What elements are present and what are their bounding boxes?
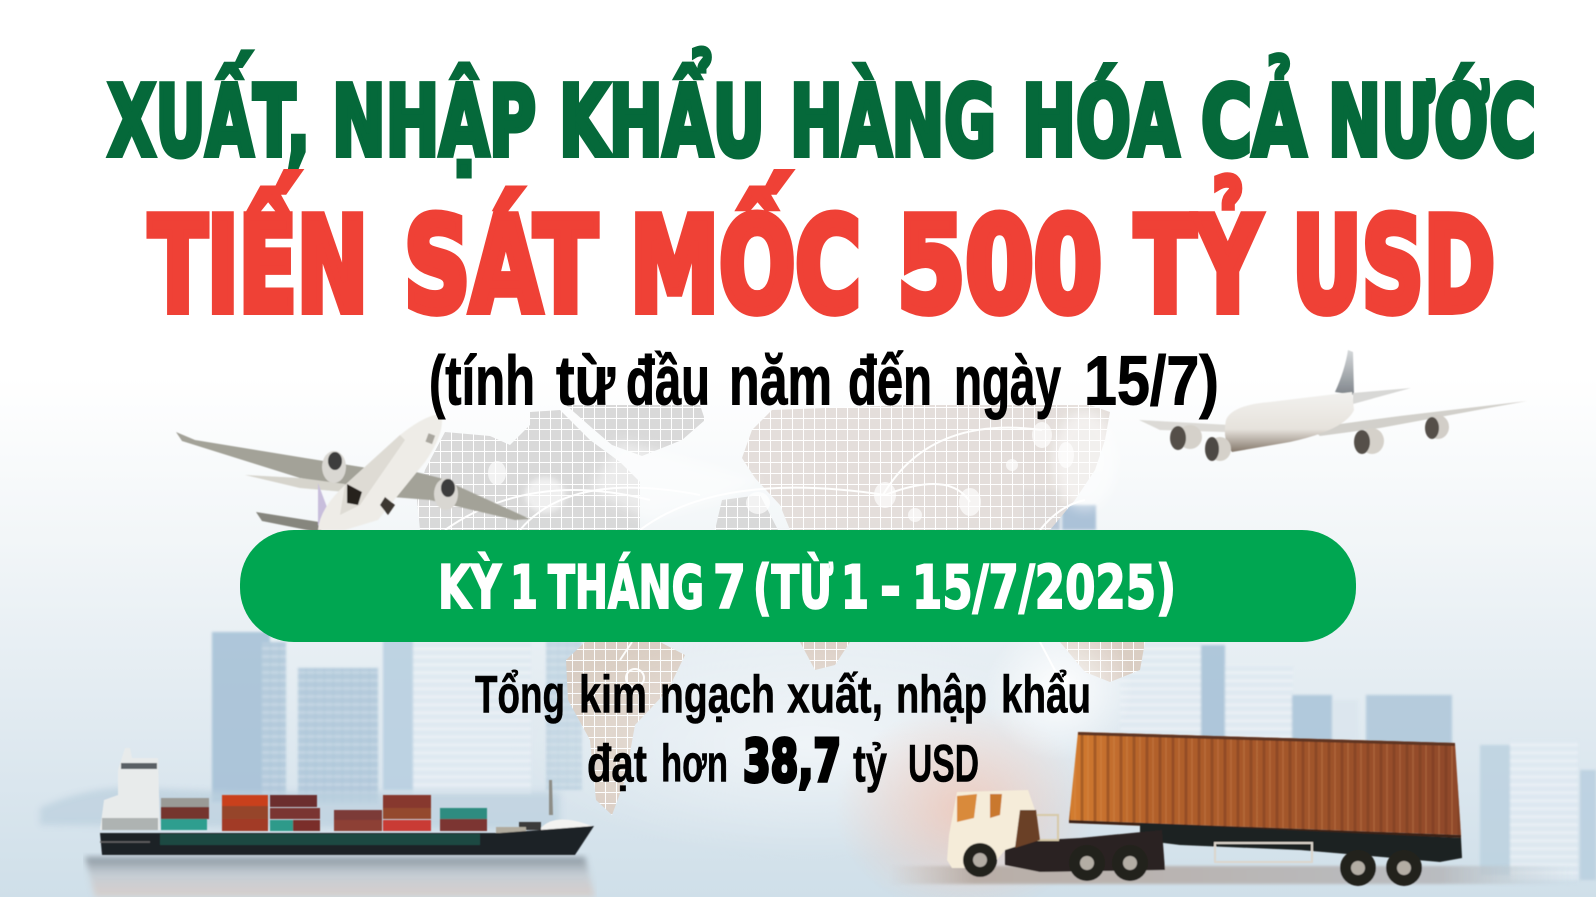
period pill: [240, 530, 1356, 642]
subtitle: đến: [848, 342, 932, 420]
period label: 1: [510, 553, 538, 623]
illustration: airplane in flight (right): [1139, 350, 1527, 461]
subtitle: ngày: [954, 342, 1061, 420]
city skyline: [40, 490, 1596, 880]
title line 2: USD: [1292, 190, 1495, 342]
total turnover text: nhập: [896, 666, 987, 724]
period label: 15/7/2025): [912, 553, 1176, 623]
title line 1: KHẨU: [559, 49, 765, 178]
total turnover text: tỷ: [853, 734, 887, 794]
total turnover text: Tổng: [475, 666, 565, 724]
period label: THÁNG: [548, 552, 704, 623]
title line 1: NHẬP: [332, 65, 536, 178]
subtitle: năm: [729, 342, 832, 420]
total turnover text: hơn: [661, 734, 728, 794]
title line 2: 500: [897, 190, 1102, 342]
title line 2: TỶ: [1135, 176, 1261, 342]
title line 2: TIẾN: [149, 172, 368, 342]
period label: -: [880, 553, 901, 623]
subtitle: [429, 342, 1219, 420]
total turnover text: xuất,: [787, 666, 883, 724]
total turnover text: ngạch: [660, 666, 775, 724]
illustration: container truck: [890, 732, 1580, 886]
illustration: container ship: [85, 748, 595, 897]
title line 2: MỐC: [630, 172, 861, 342]
period label: [438, 551, 1176, 623]
subtitle: đầu: [626, 342, 710, 420]
ship reflection: [85, 857, 595, 897]
total turnover text: [475, 666, 1091, 795]
title line 2: SÁT: [404, 190, 597, 342]
title line 1: HÀNG: [790, 65, 996, 178]
title line 2: [149, 172, 1495, 342]
value: 38,7: [743, 727, 841, 795]
period label: 7: [713, 553, 746, 623]
total turnover text: USD: [908, 734, 979, 794]
total turnover text: kim: [579, 666, 647, 724]
illustration: airplane taking off (left): [176, 414, 530, 533]
subtitle: từ: [556, 342, 615, 420]
total turnover text: khẩu: [1001, 666, 1091, 724]
road: [890, 866, 1580, 884]
period label: (TỪ: [753, 552, 833, 623]
period label: 1: [841, 553, 869, 623]
title line 1: XUẤT,: [108, 53, 310, 178]
world map: [417, 405, 1145, 815]
subtitle: 15/7): [1084, 342, 1219, 420]
network lines: [445, 423, 1085, 687]
soft glow behind lower text: [510, 620, 1135, 897]
title line 1: HÓA: [1022, 65, 1179, 178]
title line 1: [108, 49, 1536, 178]
period label: KỲ: [438, 551, 502, 623]
subtitle: (tính: [429, 342, 535, 420]
shipping container: [1069, 732, 1461, 838]
total turnover text: đạt: [587, 734, 647, 794]
title line 1: CẢ: [1201, 56, 1306, 178]
